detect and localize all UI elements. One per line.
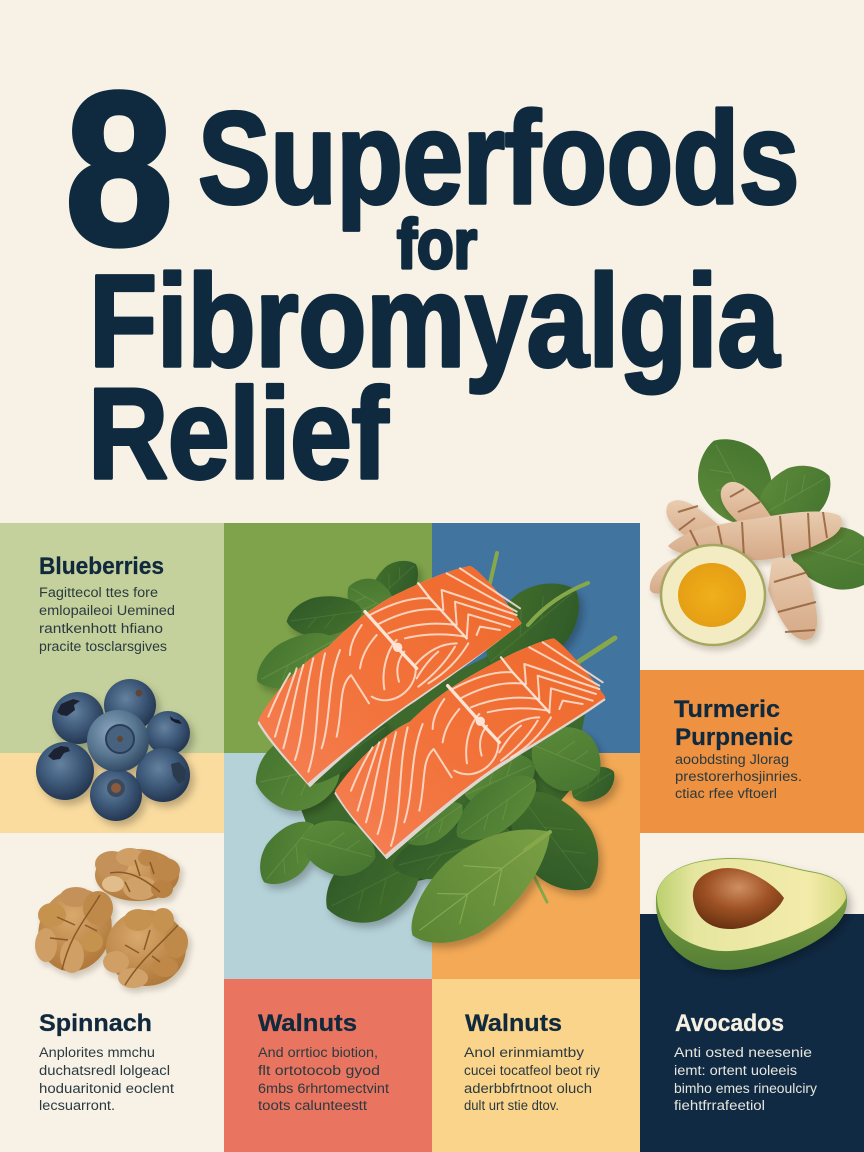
panel: walnuts coral text: Walnuts (258, 1010, 357, 1037)
icon: blueberries (36, 679, 190, 821)
panel: blueberries text (39, 553, 175, 654)
panel: avocados text: Anti osted neesenie (674, 1045, 812, 1060)
panel: turmeric text: aoobdsting Jlorag (675, 752, 789, 767)
panel: walnuts coral text: And orrtioc biotion, (258, 1045, 378, 1060)
walnut top (95, 848, 180, 901)
walnut left (27, 878, 123, 982)
panel: blueberries text: pracite tosclarsgives (39, 639, 167, 654)
panel: turmeric text: Turmeric (674, 696, 780, 723)
panel: avocados text: iemt: ortent uoleeis (674, 1063, 797, 1078)
spinach leaves (247, 551, 622, 966)
panel: blueberries text: rantkenhott hfiano (39, 621, 163, 636)
icon: turmeric with leaves (650, 424, 864, 645)
panel: walnuts coral text (258, 1010, 389, 1113)
panel: walnuts yellow text: cucei tocatfeol beot riy (464, 1063, 600, 1078)
panel: spinach text (39, 1010, 174, 1113)
title: 8 (65, 48, 173, 291)
title: for (397, 205, 477, 283)
panel: walnuts yellow text: aderbbfrtnoot oluch (464, 1081, 592, 1096)
salmon on spinach (247, 551, 622, 966)
panel: avocados text (674, 1010, 817, 1113)
panel: spinach text: Spinnach (39, 1010, 152, 1037)
leaf: turmeric lower right (782, 515, 864, 599)
stems over leaves (525, 583, 588, 850)
panel: avocados text: bimho emes rineoulciry (674, 1081, 817, 1096)
panel: spinach text: hoduaritonid eoclent (39, 1081, 174, 1096)
title: Relief (88, 362, 389, 506)
panel: walnuts coral text: 6mbs 6rhrtomectvint (258, 1081, 389, 1096)
panel: turmeric text: ctiac rfee vftoerl (675, 786, 777, 801)
leaf: turmeric upper right (746, 452, 843, 540)
panel: turmeric text: prestorerhosjinries. (675, 769, 802, 784)
panel: walnuts yellow text: dult urt stie dtov. (464, 1098, 559, 1113)
salmon fillet two (334, 638, 606, 859)
panel: blueberries text: Fagittecol ttes fore (39, 585, 158, 600)
roots (650, 482, 842, 640)
panel: turmeric text: Purpnenic (675, 724, 793, 751)
panel: walnuts yellow text: Walnuts (465, 1010, 562, 1037)
panel: avocados text: fiehtfrrafeetiol (674, 1098, 765, 1113)
panel: walnuts yellow text (464, 1010, 600, 1113)
panel: spinach text: Anplorites mmchu (39, 1045, 155, 1060)
panel: walnuts coral text: flt ortotocob gyod (258, 1063, 380, 1078)
panel: spinach text: lecsuarront. (39, 1098, 115, 1113)
spinach stems (490, 553, 615, 902)
panel: walnuts yellow text: Anol erinmiamtby (464, 1045, 584, 1060)
panel: blueberries text: Blueberries (39, 553, 164, 580)
panel: avocados text: Avocados (675, 1010, 784, 1037)
panel: walnuts coral text: toots calunteestt (258, 1098, 367, 1113)
panel: spinach text: duchatsredl lolgeacl (39, 1063, 170, 1078)
title (65, 48, 799, 506)
turmeric slice (661, 545, 765, 645)
icon: avocado half (656, 858, 847, 970)
icon: walnuts (27, 848, 188, 988)
colour grid panels (0, 523, 864, 1152)
panel: blueberries text: emlopaileoi Uemined (39, 603, 175, 618)
green base behind salmon (290, 640, 585, 885)
leaf: turmeric upper left (682, 424, 788, 539)
walnut right (103, 908, 188, 988)
avocado pit (693, 868, 784, 929)
salmon fillet one (258, 566, 522, 787)
panel: turmeric text (674, 696, 802, 801)
